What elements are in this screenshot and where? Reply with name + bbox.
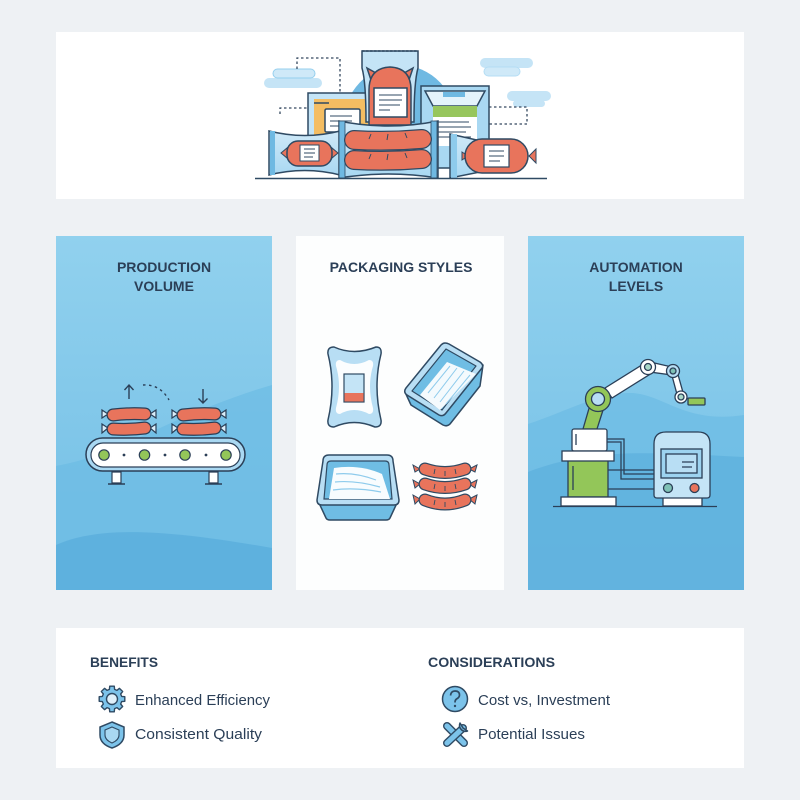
robot arm: [583, 360, 705, 429]
panel: production volume: [56, 236, 272, 590]
icon: stacked sausages: [413, 465, 477, 507]
icon: crossed tools: [447, 723, 468, 743]
green label package: [421, 86, 489, 168]
text: potential issues: Potential Issues: [478, 726, 585, 743]
robot arm machine: [553, 360, 717, 506]
robot base: [561, 429, 616, 506]
ground line: [255, 178, 547, 180]
dotted connector lines: [280, 58, 527, 124]
orange back package: [308, 93, 370, 153]
icon: down arrow: [198, 389, 208, 403]
icon: question mark: [442, 686, 468, 712]
panel: automation levels: [528, 236, 744, 590]
conveyor belt: [86, 438, 245, 484]
control cabinet: [654, 432, 710, 506]
wires: [607, 439, 654, 489]
icon: shield: [100, 722, 124, 748]
right sausage package: [450, 134, 536, 178]
panel: packaging styles: [296, 236, 504, 590]
text: enhanced efficiency: Enhanced Efficiency: [135, 692, 270, 709]
heading: production volume: VOLUME: [134, 278, 194, 294]
clouds: [264, 58, 551, 107]
icon: dashed arc: [143, 385, 169, 400]
large centre sausage package: [339, 121, 438, 178]
icon: open tray: [317, 455, 399, 520]
heading: packaging styles: PACKAGING STYLES: [330, 259, 472, 275]
panel: benefits and considerations: [56, 628, 744, 768]
heading: automation levels: AUTOMATION: [589, 259, 683, 275]
heading: considerations: CONSIDERATIONS: [428, 654, 555, 670]
icon: up arrow: [124, 385, 134, 399]
ground line: [553, 506, 717, 508]
heading: automation levels: LEVELS: [609, 278, 663, 294]
panel: hero packaging illustration: [56, 32, 744, 199]
sausages on conveyor: [102, 410, 226, 433]
heading: benefits: BENEFITS: [90, 654, 158, 670]
tall sausage package: [362, 51, 418, 125]
icon: vacuum pack: [328, 347, 381, 427]
icon: gear: [99, 686, 125, 712]
icon: tilted tray: [405, 343, 483, 426]
text: consistent quality: Consistent Quality: [135, 726, 263, 743]
heading: production volume: PRODUCTION: [117, 259, 211, 275]
small sausage package: [269, 131, 340, 175]
icon: blue sun circle: [343, 65, 457, 125]
text: cost vs investment: Cost vs, Investment: [478, 692, 611, 709]
